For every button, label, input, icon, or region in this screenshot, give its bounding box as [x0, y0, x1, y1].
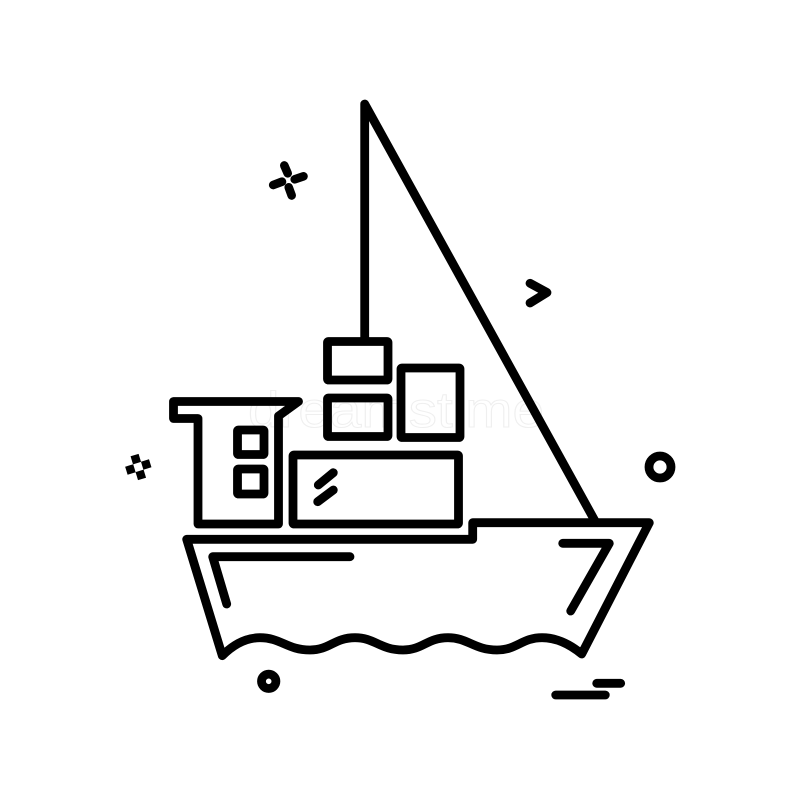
- decoration: water dashes: [556, 683, 621, 695]
- hull: [187, 523, 649, 656]
- hull highlight left: [213, 557, 350, 604]
- decoration: sparkle: [273, 166, 304, 196]
- decoration: checker diamond: [125, 454, 151, 480]
- cabin window upper: [238, 430, 264, 454]
- glass glint: [318, 473, 333, 502]
- container: long crate: [293, 455, 458, 524]
- mast and sail: [365, 104, 595, 521]
- container: tall crate: [401, 368, 460, 438]
- container: middle crate: [328, 398, 388, 436]
- cabin window lower: [238, 469, 264, 494]
- decoration: ring bottom: [262, 674, 276, 688]
- decoration: chevron: [530, 283, 547, 303]
- ship drawing: [174, 104, 671, 695]
- decoration: ring right: [649, 456, 671, 478]
- cabin: [174, 402, 298, 524]
- container: top crate: [328, 342, 388, 380]
- watermark: dreamstime: [248, 382, 544, 438]
- hull highlight right: [563, 543, 609, 611]
